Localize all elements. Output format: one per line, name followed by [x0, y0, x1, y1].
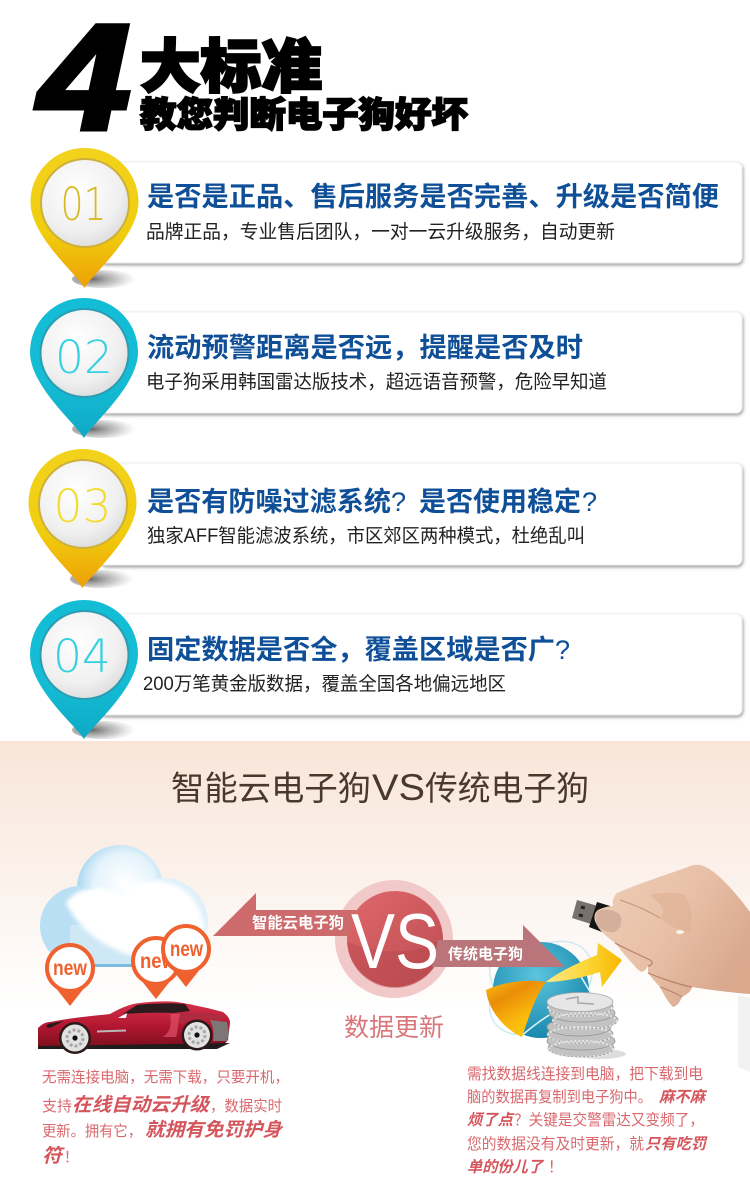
- left paragraph: ，数据实时: [210, 1095, 282, 1116]
- data update label: 数据更新: [344, 1014, 444, 1042]
- right paragraph: 脑的数据再复制到电子狗中。: [467, 1088, 652, 1106]
- question mark: ?: [391, 487, 406, 517]
- VS badge: [335, 880, 453, 998]
- description: 电子狗采用韩国雷达版技术，超远语音预警，危险早知道: [146, 367, 607, 394]
- icon: red sports car: [38, 1001, 230, 1054]
- icon: new pin left: new: [53, 957, 88, 980]
- question mark: ?: [582, 487, 597, 517]
- icon: new pin right: new: [140, 950, 177, 973]
- icon: new pin top: new: [170, 938, 204, 961]
- arrow: traditional to hand: 传统电子狗: [448, 945, 523, 963]
- description: 独家AFF智能滤波系统，市区郊区两种模式，杜绝乱叫: [147, 521, 585, 548]
- VS text: VS: [351, 897, 439, 985]
- left paragraph: 符: [42, 1145, 65, 1167]
- icon: new pin left: [47, 945, 93, 1006]
- heading: 是否是正品、售后服务是否完善、升级是否简便: [147, 182, 719, 212]
- icon: cloud: [40, 845, 208, 968]
- pin shadow: [70, 570, 134, 588]
- arrow: traditional to hand: [432, 925, 565, 967]
- heading: 流动预警距离是否远，提醒是否及时: [147, 333, 583, 363]
- panel: comparison: [0, 741, 750, 1196]
- left paragraph: [42, 1066, 289, 1167]
- left paragraph: 支持: [42, 1098, 72, 1115]
- heading: 固定数据是否全，覆盖区域是否广: [147, 635, 555, 665]
- right paragraph: 麻不麻: [659, 1088, 707, 1106]
- right paragraph: 单的份儿了: [467, 1158, 544, 1176]
- subheading: 教您判断电子狗好坏: [140, 96, 468, 135]
- title: [35, 0, 468, 161]
- icon: yellow pin 03: 03: [54, 480, 112, 533]
- icon: new pin top: [163, 926, 209, 987]
- panel: standard 04: [30, 600, 742, 739]
- icon: new pin right: [133, 938, 179, 999]
- question mark: ?: [555, 635, 570, 665]
- heading part 2: 是否使用稳定: [419, 487, 581, 517]
- comparison heading: 智能云电子狗: [171, 771, 371, 808]
- pin shadow: [72, 420, 136, 438]
- arrow: smart cloud: 智能云电子狗: [252, 913, 344, 932]
- description: 品牌正品，专业售后团队，一对一云升级服务，自动更新: [146, 217, 615, 244]
- right paragraph: [467, 1062, 708, 1177]
- left paragraph: 在线自动云升级: [72, 1094, 211, 1116]
- left paragraph: 更新。拥有它，: [42, 1120, 142, 1141]
- icon: coin stack: [547, 992, 626, 1059]
- panel: standard 03: [28, 449, 742, 588]
- panel: standard 02: [30, 298, 742, 438]
- panel: standard 01: [30, 148, 742, 288]
- left paragraph: 就拥有免罚护身: [145, 1119, 284, 1141]
- right edge block: [738, 995, 750, 1072]
- icon: teal pin 04: 04: [53, 630, 111, 683]
- left paragraph: ！: [60, 1146, 75, 1167]
- right paragraph: 需找数据线连接到电脑，把下载到电: [467, 1062, 703, 1084]
- left paragraph: 无需连接电脑，无需下载，只要开机，: [42, 1066, 289, 1087]
- icon: yellow pin 01: [30, 148, 138, 288]
- icon: yellow pin 01: 01: [60, 178, 106, 231]
- right paragraph: 烦了点: [467, 1111, 515, 1129]
- description: 200万笔黄金版数据，覆盖全国各地偏远地区: [143, 669, 506, 696]
- comparison heading: 传统电子狗: [425, 771, 589, 808]
- comparison heading: [171, 767, 589, 808]
- icon: teal pin 02: 02: [55, 331, 113, 384]
- comparison heading: VS: [372, 767, 425, 808]
- right paragraph: ？关键是交警雷达又变频了，: [514, 1108, 704, 1130]
- pin shadow: [72, 721, 136, 739]
- right paragraph: 您的数据没有及时更新，就: [467, 1132, 644, 1154]
- heading: 大标准: 大标准: [140, 35, 322, 100]
- pin shadow: [72, 270, 136, 288]
- icon: yellow pin 03: [28, 449, 136, 588]
- icon: teal pin 04: [30, 600, 138, 739]
- icon: globe: [472, 922, 610, 1054]
- right paragraph: ！: [544, 1155, 560, 1177]
- icon: yellow arrow: [486, 943, 622, 1037]
- heading: 是否有防噪过滤系统: [147, 487, 391, 517]
- right paragraph: 只有吃罚: [645, 1135, 708, 1153]
- arrow: smart cloud: [213, 893, 357, 936]
- icon: hand: [594, 865, 750, 1007]
- icon: usb drive: [572, 900, 610, 932]
- icon: teal pin 02: [30, 298, 138, 438]
